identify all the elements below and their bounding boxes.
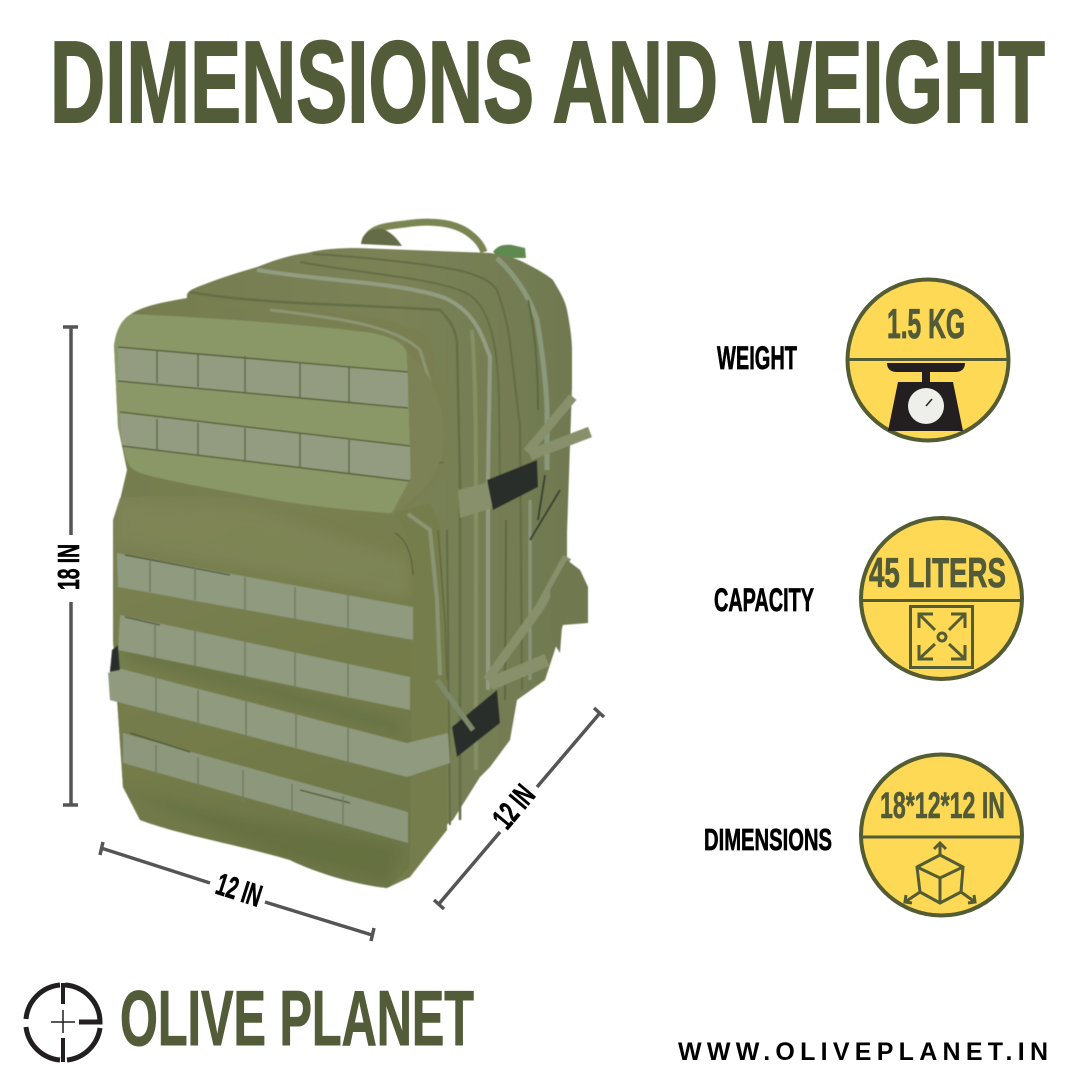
weight value: 1.5 KG bbox=[887, 300, 965, 347]
lower pocket side bbox=[387, 503, 447, 888]
height label: 18 IN bbox=[51, 544, 86, 590]
label: dimensions: DIMENSIONS bbox=[704, 822, 832, 857]
label: capacity: CAPACITY bbox=[714, 582, 814, 618]
zipper pull bbox=[437, 680, 473, 730]
website: WWW.OLIVEPLANET.IN bbox=[678, 1038, 1048, 1066]
cords near top buckle bbox=[530, 475, 560, 540]
dimensions value: 18*12*12 IN bbox=[880, 785, 1005, 826]
icon: cube with arrows bbox=[905, 843, 975, 903]
capacity value: 45 LITERS bbox=[869, 549, 1006, 596]
logo: crosshair bbox=[26, 983, 100, 1062]
lower pocket shading bbox=[130, 590, 398, 877]
lower webbing stitches bbox=[150, 560, 348, 828]
badge: capacity bbox=[861, 518, 1022, 679]
upper pocket side bbox=[187, 298, 444, 513]
width measure bbox=[100, 842, 374, 941]
upper webbing seams bbox=[118, 347, 410, 481]
height measure bbox=[51, 327, 86, 805]
left strap bbox=[108, 672, 122, 702]
upper webbing stitches bbox=[157, 350, 349, 474]
backpack illustration bbox=[108, 222, 590, 888]
upper pocket right panel bbox=[392, 353, 444, 513]
lower pocket seam bbox=[395, 533, 413, 575]
lower webbing seams bbox=[125, 555, 350, 803]
side ridges and zippers bbox=[190, 254, 547, 825]
handle bbox=[361, 222, 484, 252]
badge: dimensions bbox=[861, 754, 1022, 916]
depth label: 12 IN bbox=[486, 778, 542, 835]
label: weight: WEIGHT bbox=[717, 340, 797, 376]
zipper tag bbox=[493, 245, 526, 258]
right strap bands bbox=[458, 482, 588, 653]
width label: 12 IN bbox=[212, 866, 266, 914]
depth measure bbox=[434, 708, 604, 909]
upper pocket front face velcro bbox=[114, 314, 411, 513]
badge: weight bbox=[848, 280, 1008, 440]
main body bbox=[113, 248, 588, 888]
icon: expand bbox=[910, 606, 972, 668]
brand name: OLIVE PLANET bbox=[120, 974, 474, 1062]
lower webbing rows bbox=[110, 553, 450, 843]
icon: scale bbox=[887, 363, 965, 431]
lower pocket front face bbox=[113, 496, 413, 888]
upper webbing rows bbox=[118, 348, 410, 480]
right straps bbox=[487, 397, 590, 684]
black buckles bbox=[110, 460, 538, 757]
